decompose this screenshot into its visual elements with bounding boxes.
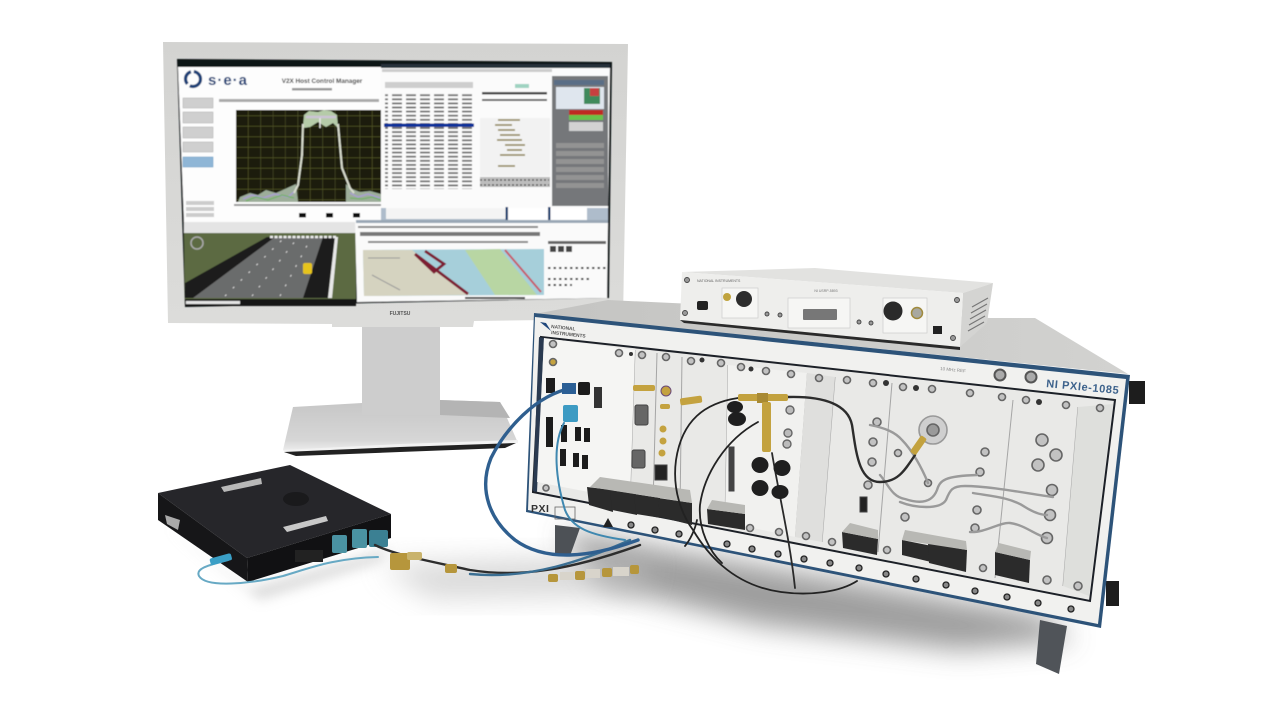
bottom shadow line [680, 320, 960, 350]
gold module connectors [633, 385, 702, 456]
dark blue ethernet cable [486, 388, 638, 555]
model name: NI PXIe-1085 [1046, 378, 1120, 397]
logo [540, 322, 587, 340]
serial connectors [632, 405, 867, 512]
black terminators [727, 401, 790, 499]
brand label: FUJITSU [390, 311, 411, 317]
semi-rigid silver cables [870, 425, 1053, 538]
controller module ports [546, 378, 602, 469]
window title: V2X Host Control Manager [282, 78, 363, 85]
chart legend [299, 213, 360, 218]
detail tree [480, 118, 550, 187]
logo: s·e·a [208, 72, 248, 89]
front panel screws [628, 522, 1074, 612]
bezel [163, 42, 628, 327]
small RF box [680, 268, 993, 350]
left application window [178, 67, 382, 222]
box ports [697, 301, 708, 310]
map [363, 249, 544, 296]
map sidebar [548, 241, 606, 285]
chassis side handles [1106, 381, 1145, 606]
noise floor right [346, 184, 381, 202]
yellow car [303, 263, 312, 274]
cables [198, 383, 927, 594]
teal cable [198, 557, 378, 584]
noise floor left [238, 184, 298, 202]
logo: INSTRUMENTS [551, 330, 587, 340]
reference connectors: 10 MHz REF [940, 366, 966, 373]
black coax run [375, 545, 640, 573]
screen [177, 59, 612, 307]
box label: NI USRP-5893 [814, 289, 838, 293]
box logo: NATIONAL INSTRUMENTS [697, 279, 741, 283]
highway simulator window [184, 222, 356, 306]
logo [186, 72, 248, 89]
module bay [533, 337, 1115, 601]
black V2X device [158, 465, 391, 582]
latch tops [590, 477, 1031, 560]
side buttons [183, 98, 214, 217]
gold tee adapter [738, 393, 927, 455]
rack feet [555, 525, 1067, 674]
module shading [537, 338, 1113, 596]
light blue ethernet cable [557, 423, 625, 540]
chassis top surface [535, 300, 1128, 374]
floor shadows [165, 525, 1075, 650]
spectrum chart [236, 110, 382, 202]
filter skirts [294, 124, 303, 193]
reference connectors [940, 366, 1036, 382]
monitor [163, 42, 628, 327]
dark indicators [629, 352, 1042, 405]
teal connectors [332, 535, 347, 553]
gold connectors [390, 552, 639, 582]
monitor stand [283, 325, 518, 456]
module separators [630, 350, 1078, 586]
RF ports [543, 340, 1104, 590]
bay left wall [533, 337, 544, 492]
black coax loops [675, 398, 857, 594]
module plates [722, 288, 758, 318]
background window strip [381, 207, 608, 220]
map application window [355, 220, 608, 302]
PXI mark: PXI [531, 503, 549, 515]
packet list window [381, 64, 610, 208]
right control panel [552, 76, 608, 206]
silver ports by the tee [783, 406, 794, 448]
module latches [587, 487, 1030, 583]
selected row [384, 124, 474, 127]
box screws [682, 278, 960, 340]
logo: NATIONAL [551, 324, 576, 333]
passband plateau [303, 110, 338, 128]
table rows [385, 92, 475, 189]
PXI mark [531, 503, 613, 527]
PXI chassis front [526, 313, 1130, 628]
